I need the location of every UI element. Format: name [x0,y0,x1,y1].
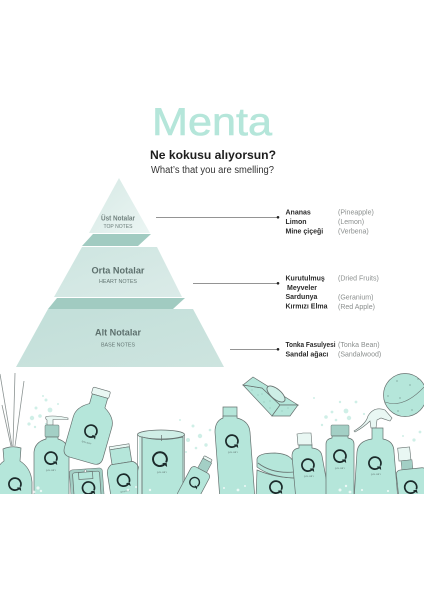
product: spray bottle: QOLORY [371,474,381,476]
product: small vial [177,456,212,494]
product: pump bottle [34,416,69,500]
pyramid band: lower [48,298,185,309]
white specks over lower bottles [33,485,389,493]
product: small spray [396,446,424,494]
pyramid tier: top notes [89,178,150,233]
title: Menta [152,101,272,144]
product: screw cap bottle [326,425,354,500]
notes list: heart notes: Sardunya [286,294,318,301]
notes list: base notes: Sandal ağacı [286,352,328,358]
notes list: heart notes: (Dried Fruits) [338,276,379,282]
product: pump bottle: QOLORY [46,470,56,472]
product: screw cap bottle: QOLORY [335,468,345,470]
product illustration [0,373,424,494]
notes list: heart notes [286,276,379,311]
notes list: top notes: Limon [286,219,306,226]
notes list: top notes: (Verbena) [338,228,369,236]
notes list: top notes: (Pineapple) [338,210,374,216]
notes list: heart notes: Kurutulmuş [286,276,325,282]
notes list: heart notes: Kırmızı Elma [286,304,328,310]
notes list: base notes: (Tonka Bean) [338,342,380,349]
pyramid tier: top notes: TOP NOTES [104,224,133,230]
connector: heart notes [193,282,279,285]
pyramid tier: top notes: Üst Notalar [101,214,135,222]
product: small bottle with cap: QOLORY [120,490,131,494]
notes list: top notes: Mine çiçeği [286,228,323,236]
product: small bottle with cap [107,443,139,494]
product: tilted bottle: QOLORY [81,441,92,446]
notes list: top notes [286,210,374,236]
pyramid tier: base notes [16,309,224,367]
notes list: heart notes: (Geranium) [338,294,373,302]
subheading: What’s that you are smelling? [151,165,274,176]
product: flip cap bottle: QOLORY [304,476,314,478]
pyramid tier: base notes: Alt Notalar [95,328,141,338]
product: soap bar [243,377,298,416]
pyramid tier: heart notes [54,247,182,297]
product: candle [138,430,184,500]
notes list: base notes: Tonka Fasulyesi [286,342,336,349]
product: reed diffuser [0,373,32,500]
heading: Ne kokusu alıyorsun? [150,148,276,162]
notes list: heart notes: (Red Apple) [338,304,375,311]
product: tilted bottle [64,386,113,465]
product: tall bottle [215,407,255,500]
product: flip cap bottle [292,432,326,494]
product: pocket spray [69,468,104,494]
paint splatter [27,395,421,453]
pyramid tier: base notes: BASE NOTES [101,342,135,348]
product: bath bomb [384,374,424,416]
pyramid tier: heart notes: HEART NOTES [99,279,137,285]
connector: base notes [230,348,279,351]
product: tall bottle: QOLORY [228,452,238,454]
product: jar [256,452,296,494]
notes list: base notes: (Sandalwood) [338,352,381,358]
connector: top notes [156,216,279,219]
product: spray bottle [354,409,398,500]
pyramid [16,178,224,367]
pyramid tier: heart notes: Orta Notalar [92,266,145,276]
notes list: top notes: (Lemon) [338,219,364,226]
notes list: top notes: Ananas [286,210,311,216]
pyramid band: upper [82,234,151,246]
notes list: base notes [286,342,381,358]
notes list: heart notes: Meyveler [287,285,317,292]
product: candle: QOLORY [157,472,167,474]
